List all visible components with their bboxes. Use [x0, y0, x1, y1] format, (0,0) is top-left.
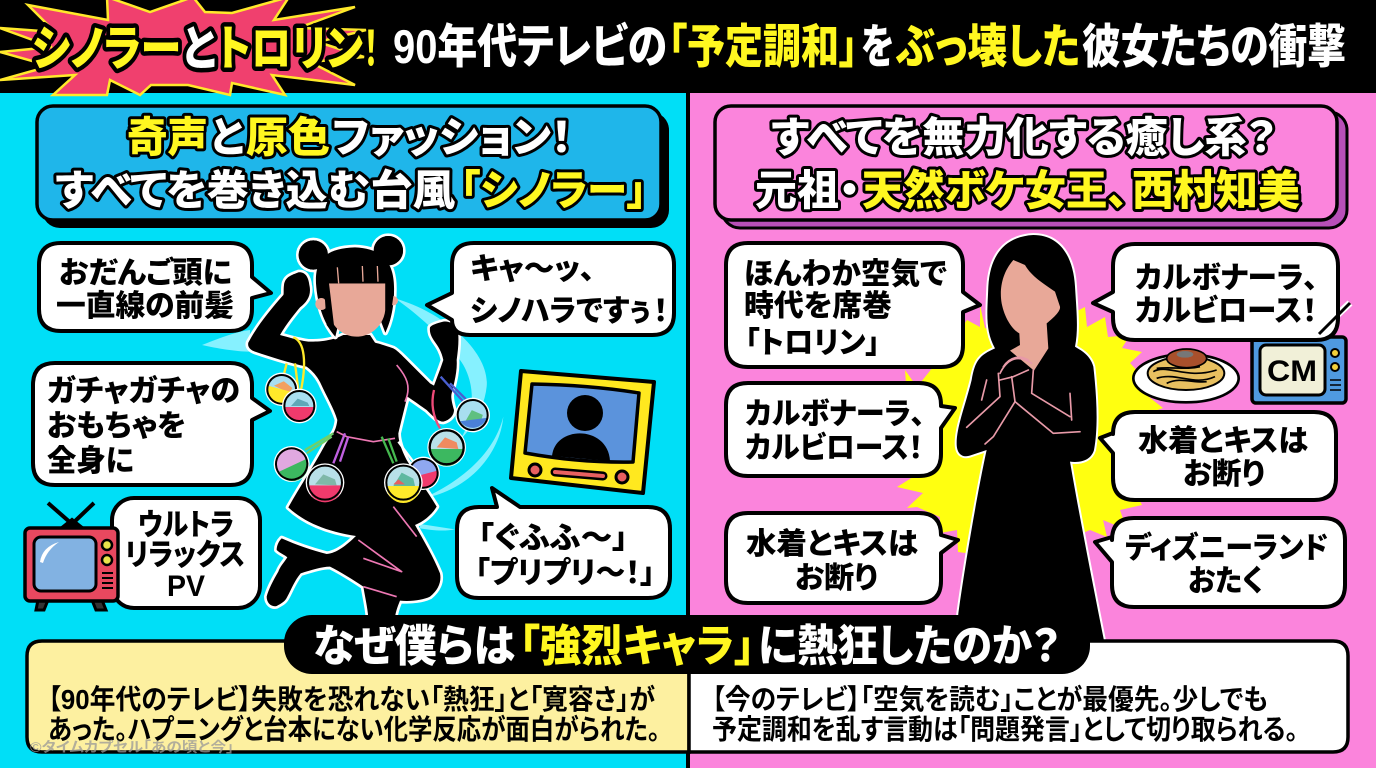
callout: carbonara right — [1093, 244, 1338, 340]
callout: carbonara left: カルビロース！ — [745, 431, 923, 465]
panel heading: right: 元祖・ — [755, 167, 860, 214]
callout: honwaka: ほんわか空気で — [744, 258, 947, 291]
callout: carbonara right: カルビロース！ — [1135, 294, 1317, 328]
title left: ！ — [364, 23, 378, 76]
panel heading: left: 「シノラー」 — [460, 167, 647, 214]
capsule: yellow lower — [384, 463, 423, 503]
bottom box: today's TV: 予定調和を乱す言動は「問題発言」として切り取られる。 — [712, 714, 1298, 745]
callout: ultra relax PV: リラックス — [125, 539, 245, 572]
callout: ultra relax PV — [112, 498, 260, 608]
title right: 「予定調和」 — [668, 20, 858, 73]
bottom box: 90s TV: あった。ハプニングと台本にない化学反応が面白がられた。 — [48, 713, 660, 745]
bottom box: today's TV — [689, 641, 1348, 752]
bottom headline pill: に熱狂したのか？ — [758, 622, 1060, 671]
silhouette body — [248, 272, 458, 617]
callout: swimsuit left — [726, 513, 958, 603]
callout: gufufu: 「プリプリ〜！」 — [475, 557, 655, 590]
bottom headline pill: 「強烈キャラ」 — [519, 622, 755, 671]
icon: CM TV — [1252, 303, 1350, 403]
capsule: yellow — [261, 369, 302, 410]
callout: honwaka: 時代を席巻 — [744, 290, 892, 323]
icon: red TV — [25, 503, 118, 610]
callout: carbonara left — [726, 383, 955, 476]
title right: 90年代テレビの — [393, 20, 667, 73]
callout: gachagacha: 全身に — [47, 445, 134, 478]
bottom box: 90s TV: 【90年代のテレビ】失敗を恐れない「熱狂」と「寛容さ」が — [48, 683, 655, 715]
callout: odango: 一直線の前髪 — [56, 290, 234, 323]
panel heading: left: 原色 — [246, 114, 330, 161]
bottom box: today's TV: 【今のテレビ】「空気を読む」ことが最優先。少しでも — [712, 683, 1268, 715]
capsule straps — [283, 337, 467, 463]
callout: honwaka — [726, 243, 980, 367]
capsule: green lower — [268, 440, 316, 488]
title left: トロリン — [217, 23, 363, 76]
face and neck — [1001, 260, 1060, 371]
title left: と — [182, 23, 216, 76]
callout: gufufu — [457, 488, 670, 598]
callout: disneyland: ディズニーランド — [1125, 531, 1328, 565]
capsule: pink lower — [306, 463, 344, 502]
callout: disneyland: おたく — [1188, 565, 1263, 598]
figure: Shinohara silhouette with capsule toys — [202, 236, 503, 617]
callout: gachagacha — [33, 363, 270, 485]
clothing pink lines — [337, 365, 417, 597]
callout: kya: シノハラですぅ！ — [470, 295, 668, 328]
callout: carbonara right: カルボナーラ、 — [1135, 262, 1318, 295]
face — [315, 264, 398, 337]
title right: を — [861, 20, 894, 73]
title left: シノラー — [32, 23, 181, 76]
callout: swimsuit left: 水着とキスは — [746, 528, 918, 561]
swirl accents — [202, 298, 503, 530]
callout: swimsuit right — [1100, 412, 1336, 500]
watermark: ©タイムカプセル「あの頃と今」 — [30, 739, 234, 755]
panel heading: right: 天然ボケ女王、 — [862, 167, 1128, 214]
capsule: rear pink — [403, 453, 444, 494]
antenna over callout — [1319, 303, 1350, 334]
center divider — [686, 93, 690, 768]
callout: gachagacha: ガチャガチャの — [47, 375, 240, 408]
callout: ultra relax PV: ウルトラ — [138, 509, 234, 542]
icon: CM TV: CM — [1267, 355, 1317, 388]
bottom box: 90s TV — [27, 641, 689, 752]
header band — [0, 0, 1376, 95]
icon: red starburst — [0, 0, 366, 95]
callout: odango — [39, 243, 271, 331]
panel heading: left: ファッション！ — [332, 114, 572, 161]
panel heading: right — [715, 106, 1347, 228]
panel heading: right: すべてを無力化する癒し系？ — [771, 114, 1276, 161]
hair and buns — [299, 236, 403, 337]
callout: carbonara left: カルボナーラ、 — [745, 398, 925, 431]
silhouette body — [957, 235, 1104, 641]
callout: kya: キャ〜ッ、 — [470, 253, 595, 286]
panel heading: left: 奇声 — [127, 114, 208, 161]
icon: yellow TV — [511, 371, 654, 493]
callout: kya — [427, 243, 674, 335]
icon: yellow burst behind Nishimura — [897, 305, 1163, 560]
panel heading: left: と — [210, 114, 244, 161]
panel heading: left: すべてを巻き込む台風 — [55, 167, 455, 214]
panel heading: left — [37, 106, 669, 228]
capsule: blue — [453, 395, 493, 435]
bottom headline pill: なぜ僕らは — [313, 622, 515, 671]
capsule: green — [427, 428, 466, 467]
background: right pink panel — [688, 93, 1376, 768]
callout: honwaka: 「トロリン」 — [745, 327, 880, 360]
callout: swimsuit right: 水着とキスは — [1138, 425, 1308, 458]
title left — [32, 23, 378, 76]
title right — [393, 20, 1346, 73]
background: left cyan panel — [0, 93, 688, 768]
panel heading: right: 西村知美 — [1132, 167, 1300, 214]
icon: spaghetti plate — [1133, 349, 1239, 402]
callout: gachagacha: おもちゃを — [47, 410, 186, 443]
callout: disneyland — [1095, 518, 1345, 607]
callout: swimsuit left: お断り — [795, 562, 878, 595]
callout: gufufu: 「ぐふふ〜」 — [478, 522, 628, 555]
title right: ぶっ壊した — [895, 20, 1080, 73]
capsule: pink — [282, 389, 317, 423]
callout: odango: おだんご頭に — [59, 256, 232, 290]
callout: swimsuit right: お断り — [1183, 458, 1265, 491]
figure: Nishimura silhouette — [957, 235, 1104, 641]
bottom headline pill — [284, 615, 1090, 674]
hands lines — [967, 357, 1080, 444]
callout: ultra relax PV: PV — [167, 570, 205, 603]
